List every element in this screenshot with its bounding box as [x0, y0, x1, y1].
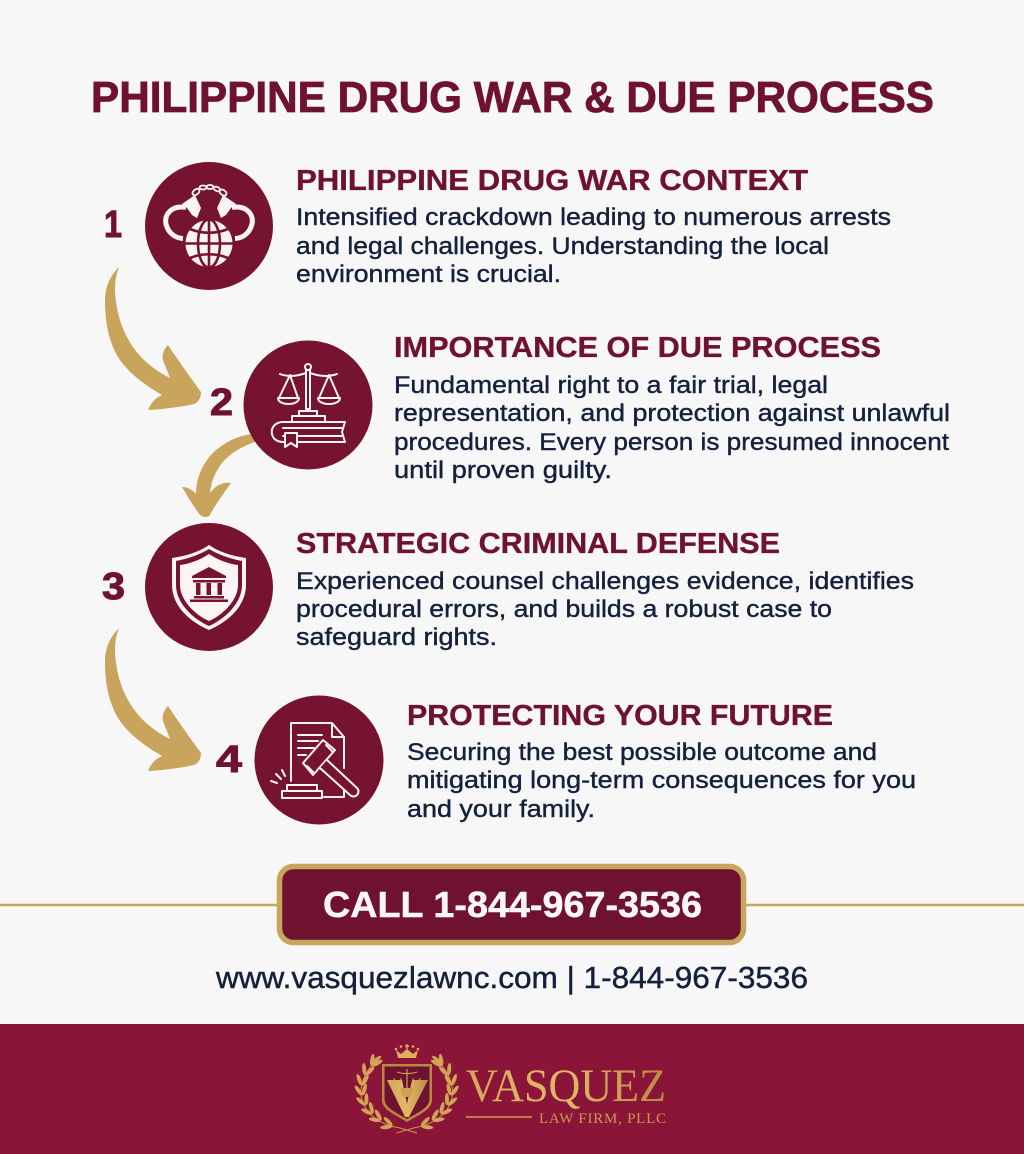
- description: and your family.: [407, 796, 595, 823]
- description: [394, 372, 950, 484]
- description: mitigating long-term consequences for you: [407, 767, 916, 794]
- step number 3: 3: [102, 566, 125, 608]
- logo wreath: [353, 1054, 460, 1133]
- description: representation, and protection against unlawful: [394, 400, 950, 427]
- icon: document and gavel: [254, 696, 384, 824]
- heading: STRATEGIC CRIMINAL DEFENSE: [296, 528, 780, 560]
- description: Securing the best possible outcome and: [407, 739, 877, 766]
- contact line: www.vasquezlawnc.com | 1-844-967-3536: [215, 961, 808, 995]
- logo crown: [395, 1044, 419, 1058]
- description: [296, 204, 891, 288]
- logo subtitle: LAW FIRM, PLLC: [539, 1111, 666, 1127]
- logo shield: [382, 1064, 432, 1122]
- heading: PROTECTING YOUR FUTURE: [407, 700, 833, 732]
- heading: IMPORTANCE OF DUE PROCESS: [394, 332, 881, 364]
- description: and legal challenges. Understanding the local: [296, 233, 829, 260]
- call button: [280, 866, 744, 942]
- description: Fundamental right to a fair trial, legal: [394, 372, 828, 399]
- heading: PHILIPPINE DRUG WAR CONTEXT: [296, 165, 809, 197]
- description: [296, 568, 914, 651]
- arrow: step 2 to step 3: [182, 434, 257, 517]
- description: safeguard rights.: [296, 624, 497, 651]
- divider lines: [0, 904, 1024, 906]
- title: PHILIPPINE DRUG WAR & DUE PROCESS: [91, 74, 934, 122]
- call button: CALL 1-844-967-3536: [323, 884, 702, 925]
- logo rule: [466, 1116, 532, 1118]
- description: Experienced counsel challenges evidence, identifies: [296, 568, 914, 595]
- description: [407, 739, 916, 823]
- description: procedures. Every person is presumed innocent: [394, 429, 949, 456]
- logo wordmark: VASQUEZ: [466, 1060, 666, 1112]
- description: environment is crucial.: [296, 261, 561, 288]
- step number 4: 4: [216, 739, 242, 781]
- footer band: [0, 1024, 1024, 1154]
- step 4: [216, 696, 916, 824]
- icon: scales of justice on book: [244, 340, 372, 470]
- step number 1: 1: [104, 204, 122, 246]
- step number 2: 2: [210, 382, 233, 424]
- step 2: [182, 332, 950, 517]
- icon: shield with courthouse: [145, 523, 273, 651]
- description: procedural errors, and builds a robust case to: [296, 596, 832, 623]
- description: Intensified crackdown leading to numerous arrests: [296, 204, 891, 231]
- icon: handcuffs and globe: [145, 162, 273, 290]
- step 3: [102, 523, 914, 651]
- arrow: step 1 to step 2: [105, 267, 201, 410]
- description: until proven guilty.: [394, 457, 612, 484]
- logo: [353, 1044, 666, 1133]
- arrow: step 3 to step 4: [105, 628, 201, 771]
- step 1: [104, 162, 891, 290]
